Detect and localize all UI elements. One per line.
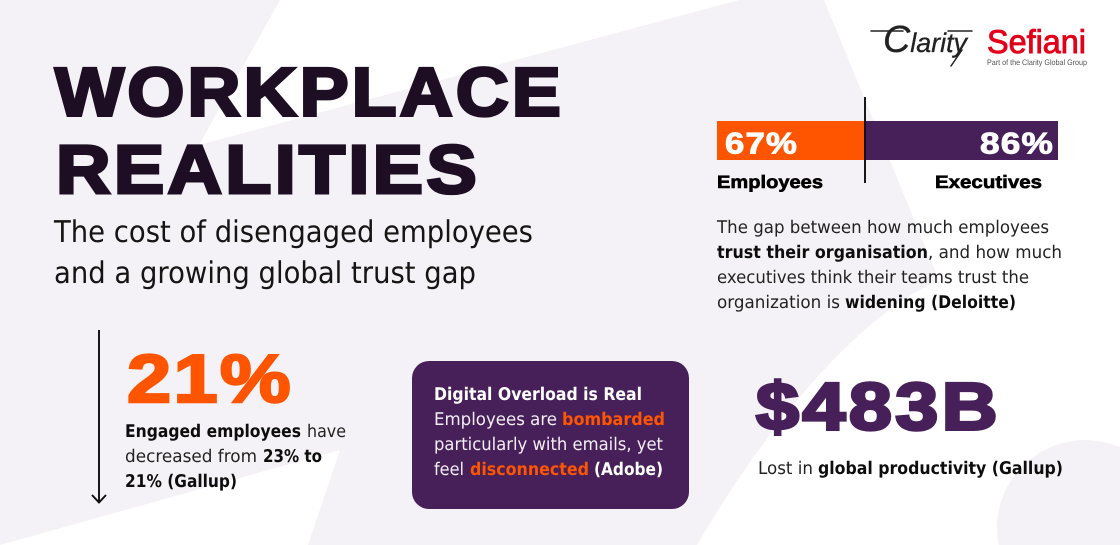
logo: Sefiani: Sefiani [987, 23, 1086, 60]
text: trust gap description: The gap between how much employees [716, 218, 1049, 238]
bar: executives [865, 121, 1058, 160]
title [55, 54, 564, 208]
text: engaged employees: 21% (Gallup) [125, 472, 237, 492]
panel body text: (Adobe) [594, 460, 663, 480]
text: engaged employees: decreased from [125, 447, 257, 467]
title: REALITIES [56, 131, 480, 208]
logos [871, 19, 1087, 67]
text: engaged employees [125, 422, 346, 492]
panel body text: bombarded [562, 410, 665, 430]
subtitle [53, 215, 533, 291]
stat: $483B: $483B [756, 370, 1001, 444]
chart: trust gap bar [717, 97, 1058, 192]
panel body text: Employees are [434, 410, 557, 430]
subtitle: The cost of disengaged employees [53, 215, 533, 250]
text: lost productivity: Lost in [758, 459, 813, 479]
text: trust gap description: widening (Deloitte) [845, 293, 1016, 313]
title: WORKPLACE [55, 54, 564, 130]
arrow: downward [92, 330, 106, 502]
text: trust gap description: executives think their teams trust the [717, 268, 1029, 288]
stat: 21%: 21% [127, 341, 293, 417]
panel body text: particularly with emails, yet [434, 435, 663, 455]
bar: employees: 67% [725, 128, 798, 160]
bar: executives: 86% [980, 128, 1054, 160]
text: engaged employees: Engaged employees [125, 422, 301, 442]
panel heading: Digital Overload is Real [434, 385, 642, 405]
panel body text [434, 410, 665, 480]
text: trust gap description: organization is [717, 293, 840, 313]
divider line [864, 97, 866, 183]
logo: Sefiani: Part of the Clarity Global Group [987, 58, 1087, 67]
panel body text: disconnected [470, 460, 589, 480]
bar: employees [717, 121, 865, 160]
label: employees: Employees [717, 172, 823, 192]
subtitle: and a growing global trust gap [54, 256, 476, 291]
text: lost productivity: global productivity (Gallup) [818, 459, 1063, 479]
text: trust gap description: , and how much [928, 243, 1062, 263]
panel body text: feel [434, 460, 464, 480]
text: engaged employees: have [307, 422, 346, 442]
panel: digital overload [412, 361, 689, 509]
label: executives: Executives [935, 172, 1042, 192]
text: trust gap description: trust their organisation [717, 243, 928, 263]
text: trust gap description [716, 218, 1062, 313]
text: engaged employees: 23% to [263, 447, 322, 467]
logo: Clarity: Clarity [883, 19, 968, 61]
